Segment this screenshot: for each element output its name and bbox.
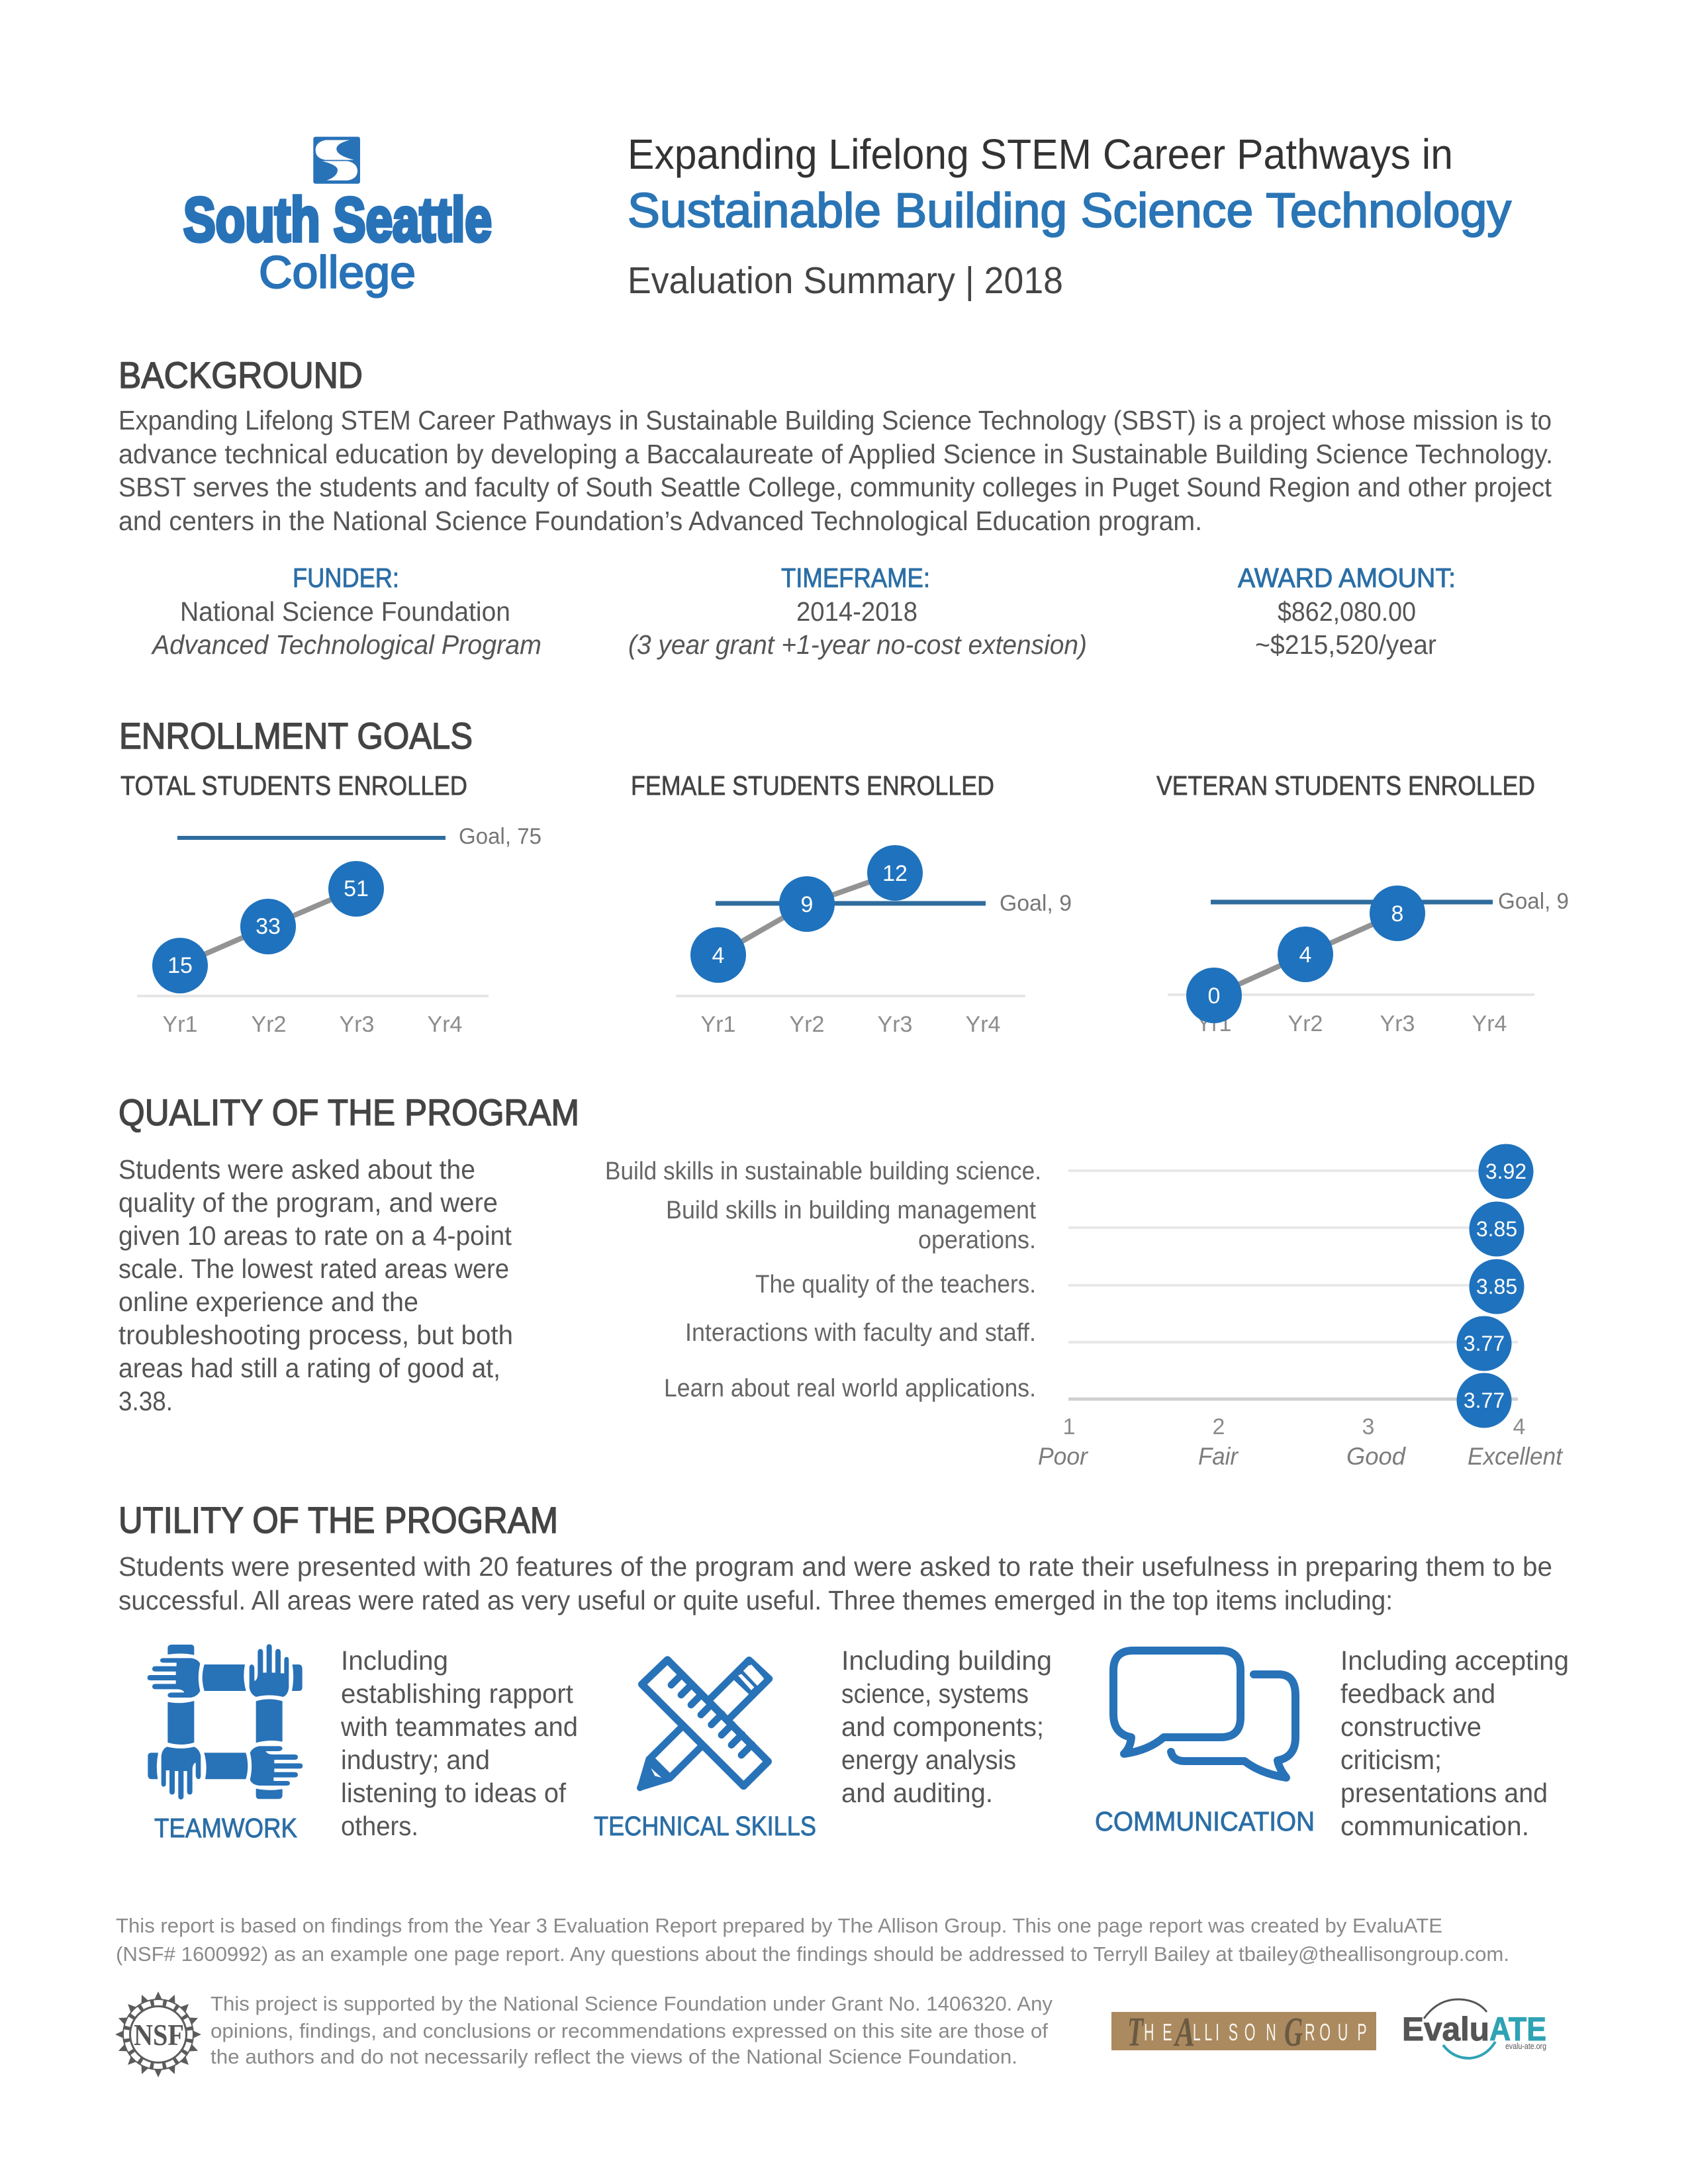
background paragraph xyxy=(118,405,1553,536)
timeframe: (3 year grant +1-year no-cost extension) xyxy=(628,629,1087,660)
footer note: (NSF# 1600992) as an example one page report. Any questions about the findings should be addressed to Terryll Bailey at tbailey@theallisongroup.com. xyxy=(116,1942,1509,1966)
communication text: constructive xyxy=(1340,1711,1481,1742)
logo initials: A xyxy=(1173,2010,1195,2055)
point: Yr1 4 xyxy=(690,927,746,983)
point: 3.77 xyxy=(1456,1373,1512,1428)
award amount xyxy=(1238,563,1456,660)
chart: female students enrolled xyxy=(631,770,1072,1037)
label: teamwork: TEAMWORK xyxy=(154,1813,297,1843)
point: Yr1 4: 4 xyxy=(712,943,724,968)
axis scale numbers: 1 xyxy=(1063,1414,1075,1439)
subtitle: Evaluation Summary | 2018 xyxy=(628,259,1063,302)
logo letters xyxy=(1144,2019,1367,2046)
point: 3.85: 3.85 xyxy=(1476,1217,1517,1241)
goal line xyxy=(1211,900,1493,904)
chart title: VETERAN STUDENTS ENROLLED xyxy=(1156,770,1535,801)
point: Yr3 8: 8 xyxy=(1391,901,1403,927)
axis scale labels xyxy=(1038,1443,1564,1470)
logo: EvaluATE: ATE xyxy=(1489,2011,1546,2048)
row label 5: Learn about real world applications. xyxy=(664,1375,1036,1402)
technical skills text: Including building xyxy=(841,1645,1052,1676)
quality paragraph: quality of the program, and were xyxy=(118,1187,498,1218)
logo letters: HE xyxy=(1144,2019,1172,2046)
point: 3.85: 3.85 xyxy=(1476,1275,1517,1298)
logo letters: ROUP xyxy=(1305,2019,1367,2046)
technical skills text xyxy=(841,1645,1052,1808)
axis labels: Yr2 xyxy=(790,1012,824,1037)
point: 3.77: 3.77 xyxy=(1464,1332,1505,1355)
logo subtitle: College xyxy=(259,247,416,298)
chart: total students enrolled xyxy=(120,770,541,1037)
logo: EvaluATE: evalu-ate.org xyxy=(1505,2041,1546,2051)
point: Yr3 12 xyxy=(867,845,923,901)
quality paragraph: given 10 areas to rate on a 4-point xyxy=(118,1220,512,1251)
row label 2: Build skills in building management xyxy=(666,1197,1036,1224)
axis labels: Yr1 xyxy=(701,1012,735,1037)
background paragraph: advance technical education by developing a Baccalaureate of Applied Science in Sustainable Building Science Technology. xyxy=(118,439,1553,469)
axis labels xyxy=(701,1012,1000,1037)
quality paragraph: Students were asked about the xyxy=(118,1154,475,1185)
award amount: ~$215,520/year xyxy=(1255,629,1436,660)
logo initials: T xyxy=(1127,2010,1144,2055)
teamwork text xyxy=(340,1645,578,1841)
point: Yr3 12: 12 xyxy=(882,861,908,886)
point: Yr2 33 xyxy=(240,899,296,954)
axis labels: Yr1 xyxy=(163,1012,197,1037)
technical skills text: and auditing. xyxy=(841,1778,993,1808)
row label 3: The quality of the teachers. xyxy=(755,1271,1036,1298)
point: 3.77 xyxy=(1456,1316,1512,1371)
title line 1: Expanding Lifelong STEM Career Pathways in xyxy=(628,130,1453,178)
chart title: FEMALE STUDENTS ENROLLED xyxy=(631,770,994,801)
point: Yr1 15: 15 xyxy=(167,953,193,978)
point: 3.92: 3.92 xyxy=(1485,1160,1526,1183)
NSF letters: NSF xyxy=(134,2018,184,2052)
icon: NSF seal xyxy=(115,1991,201,2077)
axis labels: Yr3 xyxy=(340,1012,374,1037)
point: Yr2 4: 4 xyxy=(1299,942,1311,968)
trend line xyxy=(718,873,895,955)
award amount: AWARD AMOUNT: xyxy=(1238,563,1456,593)
axis labels xyxy=(163,1012,462,1037)
axis labels: Yr3 xyxy=(878,1012,912,1037)
axis scale labels: Excellent xyxy=(1468,1443,1564,1470)
point: Yr2 9: 9 xyxy=(801,892,813,917)
communication text: Including accepting xyxy=(1340,1645,1569,1676)
point: Yr3 8 xyxy=(1370,886,1425,941)
teamwork text: Including xyxy=(341,1645,448,1676)
utility intro: Students were presented with 20 features of the program and were asked to rate their usefulness in preparing them to be xyxy=(118,1551,1552,1582)
quality paragraph: scale. The lowest rated areas were xyxy=(118,1253,509,1284)
panel: utility of the program xyxy=(118,1499,1569,1843)
quality paragraph: online experience and the xyxy=(118,1287,418,1317)
NSF disclaimer: This project is supported by the National Science Foundation under Grant No. 1406320. Any xyxy=(211,1992,1053,2015)
teamwork text: establishing rapport xyxy=(341,1678,574,1709)
axis labels: Yr2 xyxy=(252,1012,286,1037)
axis scale numbers: 4 xyxy=(1513,1414,1525,1439)
icon: speech bubbles xyxy=(1113,1651,1295,1778)
icon: pencil and ruler xyxy=(640,1660,769,1788)
axis scale numbers: 2 xyxy=(1213,1414,1225,1439)
point: Yr1 15 xyxy=(152,938,208,993)
row label 2 xyxy=(666,1197,1036,1254)
point: 3.85 xyxy=(1470,1259,1524,1314)
logo: The Allison Group xyxy=(1111,2010,1376,2055)
logo initials xyxy=(1127,2010,1303,2055)
quality paragraph xyxy=(118,1154,513,1416)
background paragraph: Expanding Lifelong STEM Career Pathways in Sustainable Building Science Technology (SBST) is a project whose mission is to xyxy=(118,405,1552,435)
communication text: feedback and xyxy=(1340,1678,1495,1709)
logo initials: G xyxy=(1284,2010,1303,2055)
axis labels: Yr3 xyxy=(1380,1011,1415,1036)
axis labels: Yr4 xyxy=(428,1012,462,1037)
axis labels: Yr2 xyxy=(1288,1011,1323,1036)
point: Yr2 33: 33 xyxy=(256,914,281,939)
trend line xyxy=(180,889,356,965)
goal line xyxy=(177,836,445,840)
point: 3.77: 3.77 xyxy=(1464,1388,1505,1412)
award amount: $862,080.00 xyxy=(1278,596,1416,627)
goal label: Goal, 9 xyxy=(1498,889,1569,914)
quality paragraph: 3.38. xyxy=(118,1386,173,1416)
utility intro xyxy=(118,1551,1552,1615)
background paragraph: SBST serves the students and faculty of South Seattle College, community colleges in Puget Sound Region and other project xyxy=(118,472,1552,502)
label: communication: COMMUNICATION xyxy=(1095,1806,1315,1837)
background paragraph: and centers in the National Science Foundation’s Advanced Technological Education program. xyxy=(118,506,1202,536)
heading: enrollment goals: ENROLLMENT GOALS xyxy=(119,715,473,756)
NSF disclaimer: opinions, findings, and conclusions or recommendations expressed on this site are those of xyxy=(211,2019,1048,2042)
title block xyxy=(628,130,1511,302)
NSF disclaimer xyxy=(211,1992,1053,2068)
point: Yr3 51 xyxy=(328,861,384,917)
funder: National Science Foundation xyxy=(180,596,510,627)
point: Yr1 0 xyxy=(1186,968,1242,1023)
axis scale labels: Poor xyxy=(1038,1443,1089,1470)
timeframe: TIMEFRAME: xyxy=(781,563,930,593)
panel: quality of the program xyxy=(118,1091,1564,1470)
panel: background xyxy=(118,354,1553,660)
axis labels xyxy=(1197,1011,1507,1036)
funder: Advanced Technological Program xyxy=(150,629,541,660)
axis labels: Yr1 xyxy=(1197,1011,1231,1036)
timeframe: 2014-2018 xyxy=(796,596,917,627)
logo: EvaluATE xyxy=(1402,1999,1546,2058)
communication text xyxy=(1340,1645,1569,1841)
row label 1: Build skills in sustainable building science. xyxy=(605,1158,1041,1185)
quality paragraph: troubleshooting process, but both xyxy=(118,1320,513,1350)
logo: EvaluATE: Evalu xyxy=(1402,2011,1489,2048)
axis scale labels: Fair xyxy=(1198,1443,1239,1470)
technical skills text: science, systems xyxy=(841,1678,1029,1709)
title line 2: Sustainable Building Science Technology xyxy=(628,184,1511,238)
heading: quality: QUALITY OF THE PROGRAM xyxy=(118,1091,579,1133)
goal label: Goal, 9 xyxy=(1000,891,1072,916)
logo: South Seattle College xyxy=(183,137,492,298)
teamwork text: others. xyxy=(341,1811,418,1841)
funder: FUNDER: xyxy=(293,563,399,593)
label: technical skills: TECHNICAL SKILLS xyxy=(594,1811,816,1841)
icon: S emblem xyxy=(313,137,360,184)
axis scale numbers xyxy=(1063,1414,1525,1439)
axis labels: Yr4 xyxy=(1472,1011,1507,1036)
communication text: presentations and xyxy=(1340,1778,1548,1808)
chart title: TOTAL STUDENTS ENROLLED xyxy=(120,770,467,801)
teamwork text: industry; and xyxy=(341,1745,490,1775)
axis scale labels: Good xyxy=(1346,1443,1406,1470)
axis scale numbers: 3 xyxy=(1362,1414,1374,1439)
chart: veteran students enrolled xyxy=(1156,770,1569,1036)
goal label: Goal, 75 xyxy=(459,824,541,849)
point: 3.85 xyxy=(1470,1202,1524,1256)
icon: teamwork hands xyxy=(148,1644,303,1799)
dot chart: quality ratings xyxy=(605,1144,1564,1470)
funder xyxy=(150,563,541,660)
row label 2: operations. xyxy=(918,1226,1036,1254)
point: Yr2 9 xyxy=(779,876,835,932)
point: Yr3 51: 51 xyxy=(344,876,369,901)
teamwork text: listening to ideas of xyxy=(341,1778,567,1808)
technical skills text: and components; xyxy=(841,1711,1044,1742)
row label 4: Interactions with faculty and staff. xyxy=(685,1319,1036,1347)
trend line xyxy=(1214,913,1397,995)
NSF disclaimer: the authors and do not necessarily reflect the views of the National Science Foundation. xyxy=(211,2045,1017,2068)
point: Yr1 0: 0 xyxy=(1208,983,1220,1009)
utility intro: successful. All areas were rated as very useful or quite useful. Three themes emerged in the top items including: xyxy=(118,1585,1393,1615)
technical skills text: energy analysis xyxy=(841,1745,1016,1775)
heading: utility: UTILITY OF THE PROGRAM xyxy=(118,1499,558,1541)
point: 3.92 xyxy=(1479,1144,1533,1199)
point: Yr2 4 xyxy=(1278,927,1333,982)
footer note: This report is based on findings from the Year 3 Evaluation Report prepared by The Allison Group. This one page report was created by EvaluATE xyxy=(116,1914,1442,1937)
communication text: criticism; xyxy=(1340,1745,1442,1775)
teamwork text: with teammates and xyxy=(340,1711,578,1742)
logo wordmark: South Seattle xyxy=(183,185,492,254)
axis labels: Yr4 xyxy=(966,1012,1000,1037)
communication text: communication. xyxy=(1340,1811,1529,1841)
quality paragraph: areas had still a rating of good at, xyxy=(118,1353,500,1383)
footer note xyxy=(116,1914,1509,1966)
panel: enrollment goals xyxy=(119,715,1569,1037)
goal line xyxy=(716,901,986,905)
heading: background: BACKGROUND xyxy=(118,354,363,396)
timeframe xyxy=(628,563,1087,660)
logo letters: LLISON xyxy=(1193,2019,1276,2046)
